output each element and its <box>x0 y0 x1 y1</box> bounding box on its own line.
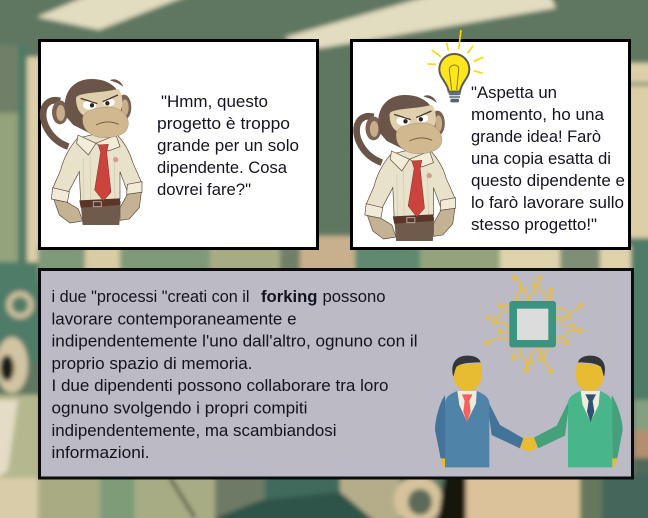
explanation text: i due "processi "creati con il <box>52 288 250 306</box>
speech text: second panel: momento, ho una <box>471 106 605 124</box>
speech text: first panel: dovrei fare?" <box>157 181 251 199</box>
explanation text: proprio spazio di memoria. <box>52 355 253 373</box>
speech text: second panel: grande idea! Farò <box>471 128 601 146</box>
explanation text: informazioni. <box>52 444 150 462</box>
speech text: first panel <box>157 93 299 199</box>
panel: monkey has an idea <box>352 30 630 248</box>
speech text: second panel: "Aspetta un <box>471 84 557 102</box>
speech text: second panel: una copia esatta di <box>471 150 611 168</box>
clasped hands <box>520 437 537 452</box>
left man <box>435 356 523 467</box>
explanation text: indipendentemente l'uno dall'altro, ognuno con il <box>52 332 418 350</box>
illustration: monkey with idea <box>357 95 455 241</box>
explanation text: lavorare contemporaneamente e <box>52 310 296 328</box>
explanation text: I due dipendenti possono collaborare tra loro <box>52 377 388 395</box>
icon: processor chip with circuits <box>485 276 583 373</box>
speech text: second panel: questo dipendente e <box>471 172 625 190</box>
panel: monkey has a problem <box>40 40 318 248</box>
explanation text: possono <box>322 288 386 306</box>
icon: two businessmen shaking hands <box>435 356 623 467</box>
speech text: second panel <box>471 84 625 234</box>
panel: explanation of forking <box>40 270 632 478</box>
illustration: thoughtful monkey <box>43 79 142 225</box>
speech text: first panel: dipendente. Cosa <box>157 159 288 177</box>
explanation text: forking <box>261 288 318 306</box>
speech text: first panel: progetto è troppo <box>157 115 290 133</box>
right man <box>534 356 623 467</box>
explanation text: indipendentemente, ma scambiandosi <box>52 422 336 440</box>
speech text: second panel: lo farò lavorare sullo <box>471 194 624 212</box>
speech text: second panel: stesso progetto!" <box>471 216 597 234</box>
speech text: first panel: "Hmm, questo <box>161 93 268 111</box>
speech text: first panel: grande per un solo <box>157 137 299 155</box>
explanation text: ognuno svolgendo i propri compiti <box>52 400 308 418</box>
explanation text <box>52 288 418 462</box>
icon: light bulb <box>427 30 483 102</box>
